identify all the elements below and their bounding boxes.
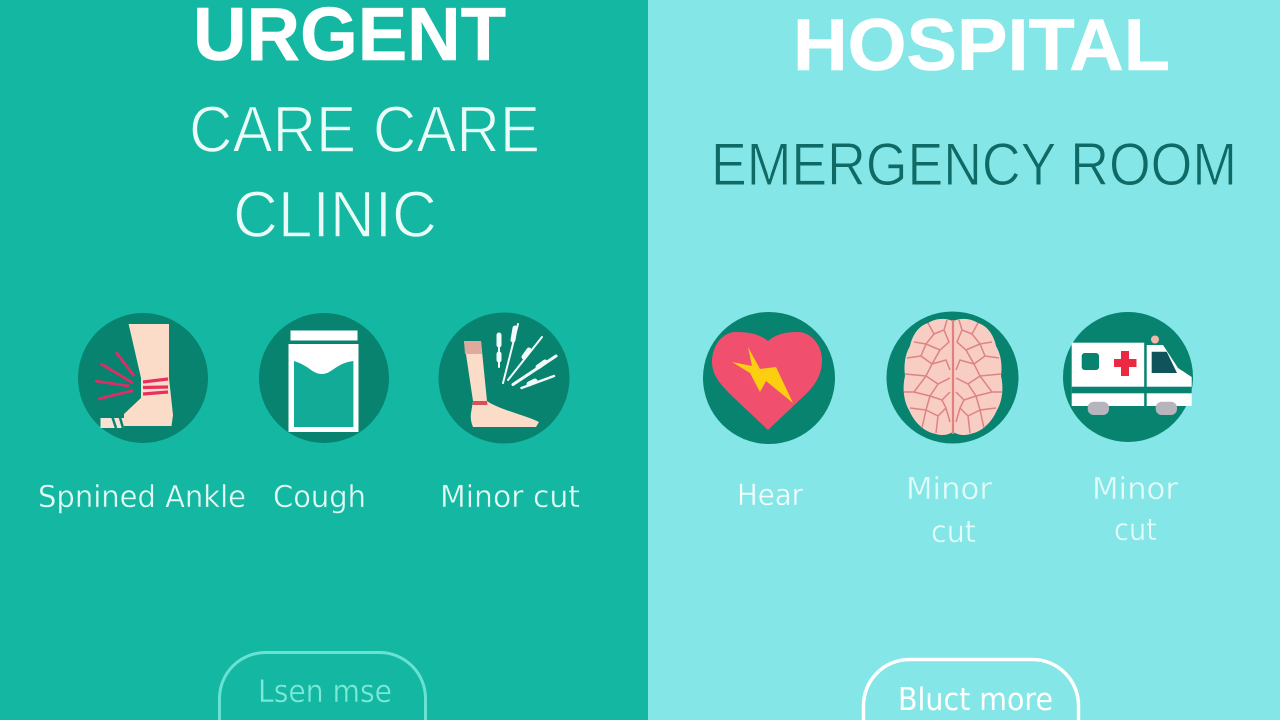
- label: cough: Cough: [273, 480, 366, 515]
- icon: brain: [886, 312, 1018, 444]
- label: sprained ankle: Spnined Ankle: [38, 480, 246, 515]
- button: find out more: Bluct more: [898, 682, 1053, 718]
- label: minor cut, right: Minor: [1092, 472, 1179, 507]
- label: minor cut, right: [1092, 472, 1179, 548]
- button: learn more: Lsen mse: [258, 674, 392, 710]
- heading: hospital: HOSPITAL: [793, 5, 1170, 86]
- subheading: care care: CARE CARE: [189, 92, 540, 166]
- label: minor cut: Minor cut: [440, 480, 580, 515]
- icon: minor cut: [438, 312, 570, 444]
- icon: ambulance: [1063, 312, 1193, 442]
- label: minor cut, centre: cut: [931, 515, 976, 550]
- label: heart: Hear: [737, 478, 803, 512]
- label: minor cut, centre: Minor: [906, 472, 993, 507]
- panel: hospital emergency room: [648, 0, 1280, 720]
- icon: sprained ankle: [78, 313, 208, 443]
- label: minor cut, right: cut: [1114, 513, 1157, 548]
- label: minor cut, centre: [906, 472, 993, 550]
- icon: cough: [259, 313, 389, 443]
- icon: heart attack: [703, 312, 835, 444]
- panel: urgent care clinic: [0, 0, 648, 720]
- subheading: clinic: CLINIC: [233, 177, 437, 251]
- button: find out more: [864, 660, 1078, 720]
- button: learn more: [220, 652, 426, 720]
